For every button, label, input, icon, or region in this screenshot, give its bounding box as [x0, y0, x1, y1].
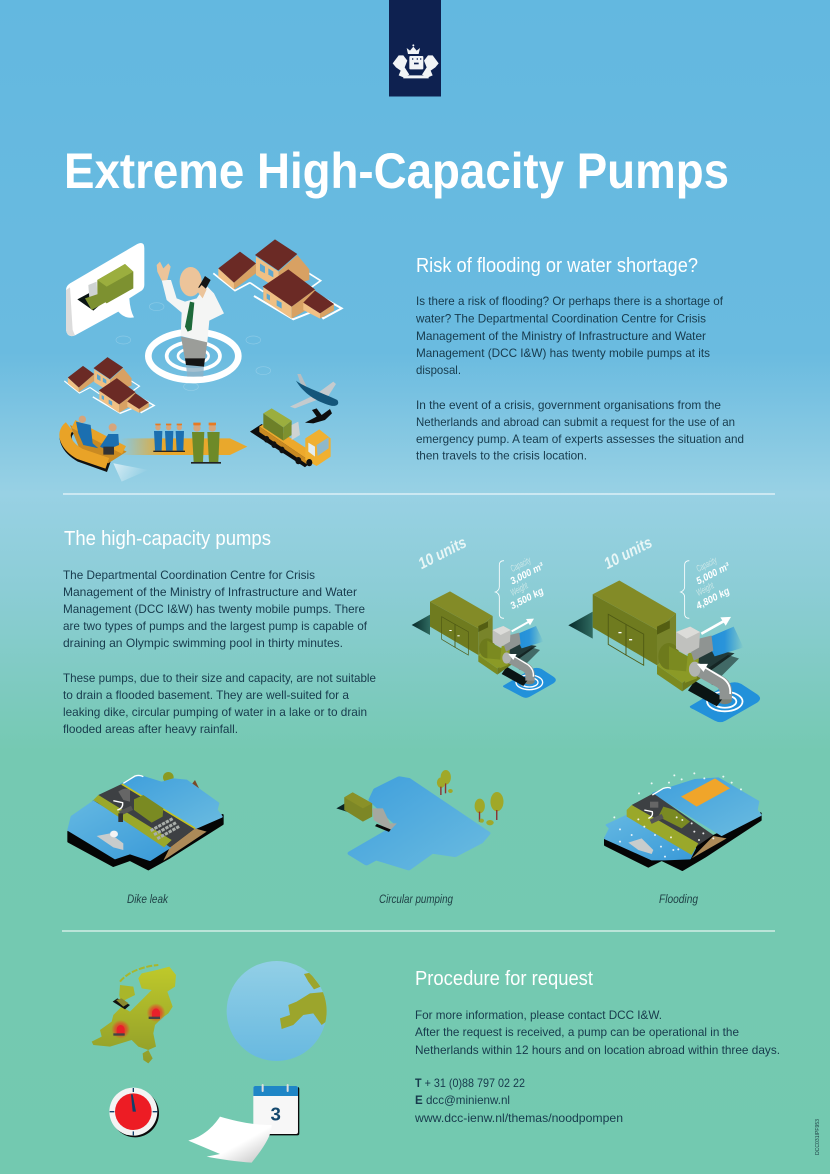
text block: pumps — [63, 569, 376, 736]
text block: risk of flooding: Management of the Ministry of Infrastructure and Water — [416, 330, 706, 343]
text block: risk of flooding: then travels to the crisis location. — [416, 450, 587, 462]
heading: the high-capacity pumps: The high-capacity pumps — [64, 528, 271, 550]
text block: risk of flooding: water? The Departmental Coordination Centre for Crisis — [415, 312, 706, 326]
contact details: E dcc@minienw.nl — [415, 1094, 510, 1107]
icon: globe with Europe — [227, 961, 328, 1061]
group: soldiers in green — [191, 423, 221, 464]
caption: flooding: Flooding — [659, 892, 698, 906]
contact details: T + 31 (0)88 797 02 22 — [415, 1077, 525, 1090]
group: experts in blue overalls — [153, 424, 185, 452]
title: Extreme High-Capacity Pumps — [64, 143, 729, 199]
icon: calendar with tear-off pages: 3 — [270, 1104, 281, 1125]
spec list: Capacity — [695, 555, 719, 574]
spec list: Capacity — [509, 555, 533, 574]
caption: dike leak: Dike leak — [127, 892, 169, 906]
scene: dike leak — [68, 772, 223, 869]
scene: circular pumping — [336, 770, 503, 868]
document reference code: DCC031IPF953 — [815, 1119, 821, 1155]
icon: clock — [109, 1088, 159, 1137]
text block: pumps: leaking dike, circular pumping of water in a lake or to drain — [63, 706, 367, 719]
contact details: www.dcc-ienw.nl/themas/noodpompen — [414, 1112, 623, 1125]
icon: airplane and shadow — [290, 374, 338, 423]
icon: inflatable boat — [65, 416, 148, 482]
icon: royal coat of arms — [393, 44, 439, 78]
text block: procedure: Netherlands within 12 hours and on location abroad within three days. — [415, 1044, 780, 1057]
text block: procedure — [415, 1009, 780, 1057]
spec list: 3,000 m³ — [509, 561, 546, 587]
label: 10 units: 10 units — [601, 534, 655, 573]
text block: risk of flooding — [415, 295, 744, 462]
text block: procedure: For more information, please contact DCC I&W. — [415, 1009, 662, 1022]
text block: risk of flooding: Management (DCC I&W) has twenty mobile pumps at its — [416, 347, 710, 360]
spec list: 4,800 kg — [694, 586, 732, 612]
contact details — [414, 1077, 623, 1125]
text block: risk of flooding: emergency pump. A team of experts assesses the situation and — [416, 433, 744, 446]
icon: truck with pump — [250, 408, 331, 467]
group: houses top right — [213, 239, 342, 319]
heading: risk of flooding: Risk of flooding or water shortage? — [416, 255, 698, 277]
text block: pumps: flooded areas after heavy rainfall. — [63, 723, 238, 736]
spec list — [694, 555, 732, 612]
chart: small pump 3,000 m3 — [412, 534, 556, 698]
group: houses lower left — [64, 357, 154, 413]
illustration: crisis response scene — [64, 239, 342, 482]
logo: Rijksoverheid ribbon — [389, 0, 441, 96]
text block: risk of flooding: disposal. — [416, 364, 461, 377]
icon: calendar with tear-off pages — [188, 1084, 299, 1163]
icon: map of the Netherlands with alarms — [92, 965, 176, 1063]
label: 10 units: 10 units — [416, 534, 470, 573]
text block: pumps: These pumps, due to their size and capacity, are not suitable — [63, 672, 376, 685]
caption: circular pumping: Circular pumping — [379, 892, 453, 906]
text block: pumps: draining an Olympic swimming pool in thirty minutes. — [63, 637, 343, 650]
text block: risk of flooding: In the event of a crisis, government organisations from the — [416, 399, 721, 412]
text block: pumps: Management of the Ministry of Infrastructure and Water — [63, 586, 357, 599]
spec list — [509, 555, 546, 612]
spec list: Weight — [509, 580, 530, 598]
text block: pumps: The Departmental Coordination Centre for Crisis — [63, 569, 315, 582]
icon: speech bubble with pump — [66, 243, 144, 336]
icon: man on the phone standing in water — [148, 262, 238, 380]
text block: risk of flooding: Netherlands and abroad can submit a request for the use of an — [416, 416, 735, 429]
scene: flooding — [605, 772, 761, 870]
chart: large pump 5,000 m3 — [568, 534, 760, 722]
spec list: Weight — [695, 580, 716, 598]
text block: pumps: are two types of pumps and the largest pump is capable of — [63, 620, 368, 633]
text block: pumps: Management (DCC I&W) has twenty mobile pumps. There — [63, 603, 365, 616]
heading: procedure for request: Procedure for request — [415, 968, 593, 990]
text block: pumps: to drain a flooded basement. They are well-suited for a — [63, 689, 350, 702]
spec list: 3,500 kg — [509, 586, 546, 612]
spec list: 5,000 m³ — [695, 561, 732, 587]
text block: risk of flooding: Is there a risk of flooding? Or perhaps there is a shortage of — [416, 295, 724, 308]
text block: procedure: After the request is received, a pump can be operational in the — [415, 1026, 739, 1039]
icon: orange direction arrow — [120, 438, 247, 455]
